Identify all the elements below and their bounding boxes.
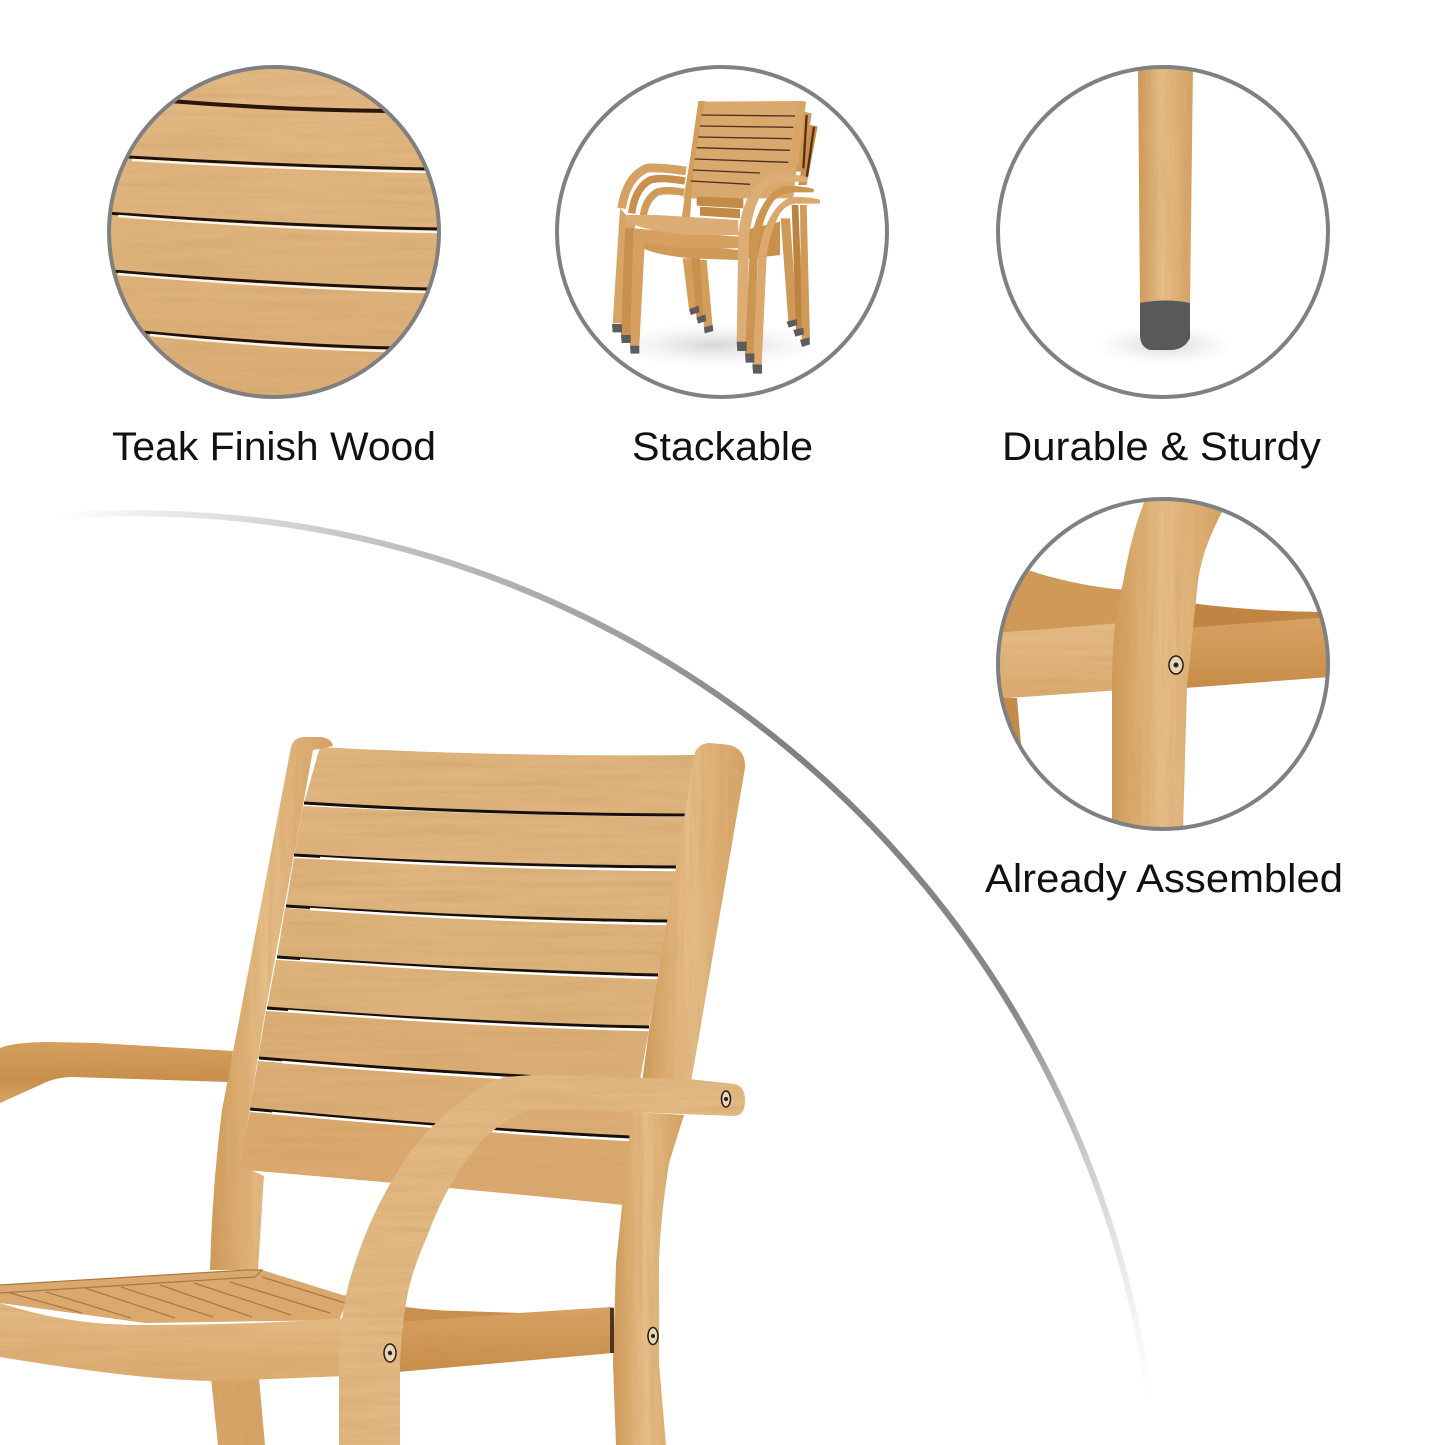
wood close-up photo [105,65,445,400]
panel: durable and sturdy [998,65,1328,469]
seat slat lines [0,1270,345,1318]
label: durable and sturdy: Durable & Sturdy [1002,425,1321,469]
decorative arc [60,513,1152,1420]
seat surface [0,1270,349,1323]
rear legs [682,258,696,312]
stacked seats [643,240,738,260]
seat side rail [398,1307,613,1372]
circle outline [109,67,439,397]
circle outline [998,67,1328,397]
label: stackable: Stackable [632,425,813,469]
rail shadow [610,1308,614,1353]
right rear legs [781,218,797,322]
label: teak finish wood: Teak Finish Wood [112,425,436,469]
label: already assembled: Already Assembled [985,857,1343,901]
back right post [642,743,745,1082]
back left post and rear leg [210,737,333,1270]
circle outline [998,499,1328,829]
back slats [240,747,698,1205]
slat highlights [272,858,676,1140]
stacked chairs illustration [610,101,820,374]
left arm [0,1042,233,1103]
arm bolt [722,1091,730,1107]
slat gaps [250,803,686,1137]
seat front [0,1303,345,1381]
rail bolt left [384,1344,396,1362]
left front legs [613,208,635,323]
front arm and leg [339,1075,745,1445]
left arms [622,168,686,208]
panel: stackable [557,67,887,469]
joint close-up photo [995,495,1330,830]
chair leg with foot cap [1116,69,1214,359]
right front legs and arms [737,174,808,342]
main chair [0,737,745,1445]
seat back rim [345,1295,613,1330]
front right leg [613,1112,684,1445]
rear leg lower [211,1378,265,1445]
rear stacked backs [796,112,812,172]
chair back [683,101,803,198]
panel: teak finish wood [105,65,445,469]
rail bolt right [648,1328,658,1344]
panel: already assembled [985,495,1343,901]
circle outline [557,67,887,397]
